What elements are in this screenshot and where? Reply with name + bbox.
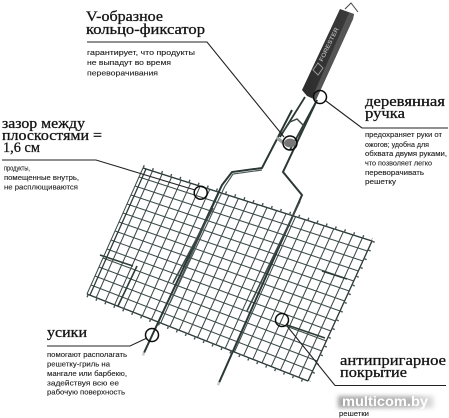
handle body — [302, 9, 354, 100]
heading: антипригарное — [340, 353, 446, 369]
grate outer frame and wire tips — [87, 168, 372, 381]
heading: V-образное — [86, 9, 163, 25]
watermark: multicom.by — [342, 393, 428, 409]
heading — [365, 94, 445, 122]
heading: кольцо-фиксатор — [86, 22, 205, 38]
description — [47, 350, 127, 396]
upper rods to handle — [280, 97, 317, 150]
marker circle — [194, 186, 207, 199]
description: не расплющиваются — [4, 182, 78, 192]
description — [365, 130, 447, 186]
description: рабочую поверхность — [47, 388, 125, 396]
description: переворачивать — [365, 168, 424, 177]
callout: prongs — [47, 325, 158, 396]
left center rod — [143, 110, 292, 355]
description: переворачивания — [87, 68, 158, 78]
marker circle — [276, 314, 288, 326]
leader line — [326, 101, 448, 128]
description: помещенные внутрь, — [4, 173, 79, 182]
heading: деревянная — [365, 94, 445, 110]
description: задействуя всю ее — [47, 378, 119, 388]
description: решетку — [365, 177, 396, 186]
heading: усики — [47, 325, 87, 341]
hanging loop — [345, 3, 358, 12]
heading: плоскостями = — [2, 128, 102, 144]
callout: wooden handle — [314, 90, 448, 186]
rod tips — [143, 352, 219, 385]
marker circle — [283, 136, 297, 150]
description: помогают располагать — [47, 350, 127, 359]
callout: V-shaped ring — [86, 9, 297, 150]
description: ожогов; удобна для — [365, 140, 429, 149]
callout: non-stick coating — [276, 314, 446, 418]
callout: gap between planes — [2, 116, 207, 199]
description — [4, 164, 79, 192]
grill grate — [87, 100, 374, 385]
description: решетки — [339, 409, 369, 418]
leader line — [87, 42, 284, 137]
heading: зазор между — [2, 116, 86, 132]
heading — [340, 353, 446, 381]
heading: ручка — [365, 106, 406, 122]
description: решетку-гриль на — [47, 360, 111, 368]
description: предохраняет руки от — [365, 130, 443, 139]
description: обхвата двумя руками, — [365, 149, 447, 158]
heading — [86, 9, 205, 38]
heading: покрытие — [340, 365, 407, 381]
heading: 1,6 см — [3, 140, 40, 156]
right center rod — [218, 100, 317, 385]
handle brand logo — [313, 63, 323, 75]
heading — [2, 116, 102, 156]
description: что позволяет легко — [365, 158, 432, 168]
leader line — [2, 160, 195, 190]
wooden handle — [302, 3, 358, 100]
grate wire mesh — [87, 168, 372, 381]
description — [87, 48, 195, 78]
marker circle — [146, 328, 158, 342]
reinforcing bars — [100, 255, 347, 338]
leader line — [47, 338, 147, 346]
v-shaped lock ring — [276, 119, 304, 148]
leader line — [287, 326, 446, 386]
description: не выпадут во время — [87, 58, 171, 67]
description: продукты, — [4, 164, 30, 172]
handle brand text: FORESTER — [319, 26, 341, 63]
description: гарантирует, что продукты — [87, 48, 195, 57]
description: мангале или барбекю, — [47, 369, 127, 378]
marker circle — [314, 90, 326, 104]
